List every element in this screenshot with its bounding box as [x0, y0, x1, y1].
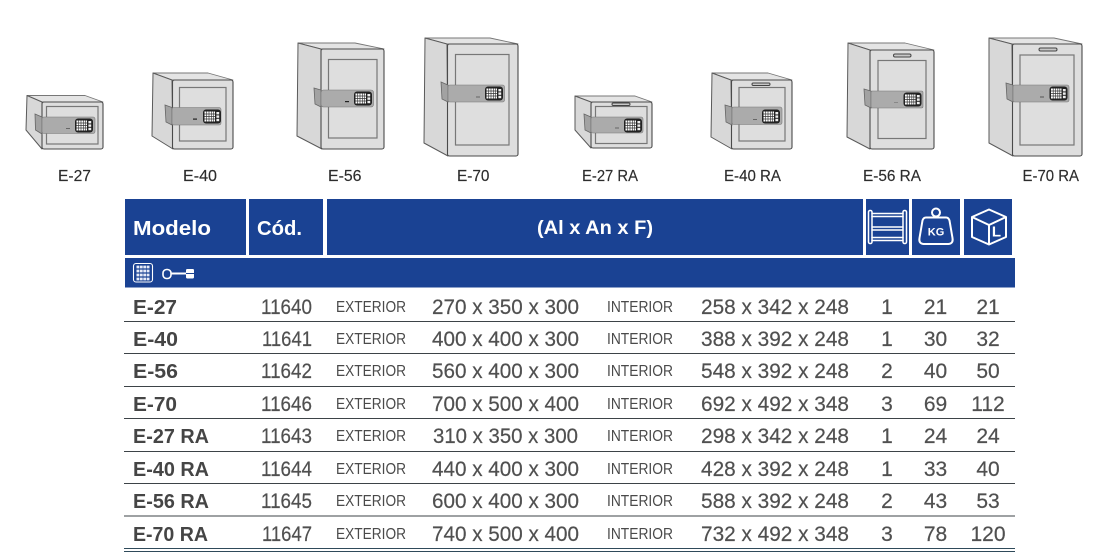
row: E-56: 11642 [261, 360, 312, 383]
row: E-70 RA: 11647 [262, 523, 312, 546]
row: E-40: 400 x 400 x 300 [432, 328, 579, 351]
row: E-56: 40 [924, 360, 947, 383]
row: E-70 [124, 393, 1015, 418]
row: E-70 RA: E-70 RA [133, 524, 208, 546]
safe: E-27 [26, 96, 103, 149]
row: E-40: 388 x 392 x 248 [701, 328, 849, 351]
row: E-70: 3 [881, 393, 893, 416]
header cell: Cód. [249, 199, 323, 255]
row: E-40 RA: 40 [976, 458, 1000, 481]
row: E-40 RA: 11644 [261, 458, 312, 481]
row: E-27 RA: 310 x 350 x 300 [433, 425, 578, 448]
row: E-56 RA: 11645 [261, 490, 312, 513]
safe: E-70 RA [989, 38, 1082, 156]
label: E-56: E-56 [328, 168, 362, 185]
row: E-56: 50 [976, 360, 1000, 383]
row: E-27: 21 [924, 296, 947, 319]
label: E-27: E-27 [58, 168, 91, 185]
label: E-27 RA: E-27 RA [582, 168, 639, 185]
row: E-40: INTERIOR [607, 331, 673, 348]
header cell: shelves [866, 199, 909, 255]
row: E-27: 11640 [261, 296, 312, 319]
row: E-40 RA: 1 [881, 458, 893, 481]
icon: weight: KG [928, 226, 944, 238]
row: E-27: 270 x 350 x 300 [432, 296, 579, 319]
row: E-40 RA: EXTERIOR [336, 461, 406, 478]
row: E-27 RA: E-27 RA [133, 426, 209, 448]
header text: dimensions: (Al x An x F) [537, 218, 653, 239]
row: E-40: 30 [924, 328, 947, 351]
header text: Cód.: Cód. [257, 218, 302, 240]
row: E-56 RA: 53 [976, 490, 1000, 513]
row: E-40: 11641 [262, 328, 312, 351]
row: E-56: EXTERIOR [336, 363, 406, 380]
row: E-27 RA: 24 [976, 425, 1000, 448]
header cell: weight [912, 199, 960, 255]
row: E-56 [124, 360, 1015, 386]
row: E-40 RA: 428 x 392 x 248 [701, 458, 849, 481]
row: E-56: 560 x 400 x 300 [432, 360, 579, 383]
row: E-56 RA: 2 [881, 490, 893, 513]
row: E-27 [124, 296, 1015, 322]
row: E-70 RA: 732 x 492 x 348 [701, 523, 849, 546]
row: E-27 RA: 298 x 342 x 248 [701, 425, 849, 448]
row: E-56 RA [124, 490, 1015, 516]
row: E-40 [124, 328, 1015, 354]
row: E-27: 1 [881, 296, 893, 319]
row: E-70 RA: 740 x 500 x 400 [432, 523, 579, 546]
row: E-40: EXTERIOR [336, 331, 406, 348]
safe: E-40 [152, 73, 233, 149]
row: E-40 RA: E-40 RA [133, 459, 209, 481]
header cell: Modelo [125, 199, 246, 255]
icon: key [163, 269, 194, 278]
header text: Modelo: Modelo [133, 218, 211, 240]
row: E-70: INTERIOR [607, 396, 673, 413]
row: E-27 RA: EXTERIOR [336, 428, 406, 445]
table header [125, 199, 1012, 255]
label: E-70: E-70 [457, 168, 490, 185]
row: E-70: 69 [924, 393, 947, 416]
row: E-40 RA: 440 x 400 x 300 [432, 458, 579, 481]
row: E-27: 21 [976, 296, 1000, 319]
row: E-70: E-70 [133, 394, 177, 416]
row: E-27: E-27 [133, 297, 177, 319]
row: E-70 RA: 78 [924, 523, 947, 546]
row: E-56 RA: EXTERIOR [336, 493, 406, 510]
safe: E-70 [424, 38, 518, 156]
row: E-56 RA: 600 x 400 x 300 [432, 490, 579, 513]
header cell: volume [964, 199, 1012, 255]
label: E-40 RA: E-40 RA [724, 168, 782, 185]
row: E-70: 112 [971, 393, 1005, 416]
row: E-40 RA [124, 458, 1015, 484]
row: E-70 RA [124, 523, 1015, 552]
icon: cube volume: L [992, 224, 1001, 240]
icon: cube volume [972, 210, 1006, 244]
row: E-27 RA: 11643 [261, 425, 312, 448]
row: E-27: 258 x 342 x 248 [701, 296, 849, 319]
row: E-70 RA: INTERIOR [607, 526, 673, 543]
row: E-27 RA: 1 [881, 425, 893, 448]
row: E-56: E-56 [133, 361, 178, 383]
band: lock type icons [125, 258, 1015, 288]
safe: E-40 RA [711, 73, 792, 149]
icon: keypad [134, 264, 152, 282]
row: E-40: 1 [881, 328, 893, 351]
row: E-27 RA: 24 [924, 425, 947, 448]
row: E-40 RA: 33 [924, 458, 947, 481]
row: E-56: 2 [881, 360, 893, 383]
label: E-70 RA: E-70 RA [1022, 168, 1080, 185]
row: E-70: 700 x 500 x 400 [432, 393, 579, 416]
row: E-56 RA: E-56 RA [133, 491, 209, 513]
row: E-70 RA: 3 [881, 523, 893, 546]
safe: E-27 RA [575, 96, 652, 148]
row: E-40: 32 [976, 328, 1000, 351]
row: E-56: INTERIOR [607, 363, 673, 380]
row: E-70: EXTERIOR [336, 396, 406, 413]
row: E-70 RA: EXTERIOR [336, 526, 406, 543]
safe: E-56 RA [847, 43, 934, 149]
header cell: dimensions [327, 199, 863, 255]
row: E-56 RA: INTERIOR [607, 493, 673, 510]
row: E-56: 548 x 392 x 248 [701, 360, 849, 383]
label: E-56 RA: E-56 RA [863, 168, 922, 185]
row: E-70: 11646 [261, 393, 312, 416]
row: E-56 RA: 43 [924, 490, 947, 513]
row: E-40: E-40 [133, 329, 178, 351]
row: E-56 RA: 588 x 392 x 248 [701, 490, 849, 513]
row: E-27: INTERIOR [607, 299, 673, 316]
label: E-40: E-40 [183, 168, 217, 185]
row: E-27 RA: INTERIOR [607, 428, 673, 445]
row: E-70 RA: 120 [970, 523, 1006, 546]
row: E-27: EXTERIOR [336, 299, 406, 316]
row: E-27 RA [124, 425, 1015, 452]
safe: E-56 [297, 43, 384, 149]
row: E-70: 692 x 492 x 348 [701, 393, 849, 416]
row: E-40 RA: INTERIOR [607, 461, 673, 478]
icon: weight [919, 208, 953, 244]
icon: shelves [868, 210, 906, 244]
